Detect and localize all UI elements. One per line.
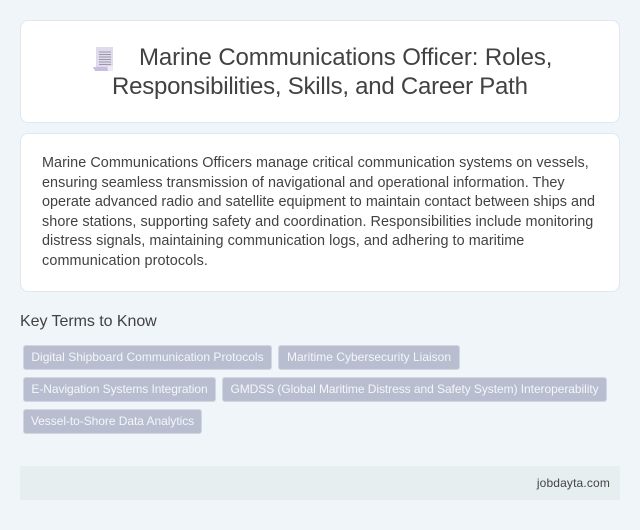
description text: distress signals, maintaining communication logs, and adhering to maritime [42, 233, 524, 249]
tag: Maritime Cybersecurity Liaison [287, 350, 451, 364]
description text: ensuring seamless transmission of navigational and operational information. They [42, 174, 565, 190]
tag [23, 409, 202, 434]
footer bar [20, 466, 620, 500]
title card [20, 20, 620, 123]
title: Marine Communications Officer: Roles, [139, 44, 552, 71]
tag: E-Navigation Systems Integration [31, 382, 208, 396]
title [112, 44, 552, 100]
tag [278, 345, 460, 370]
description text: operate advanced radio and satellite equipment to maintain contact between ships and [42, 194, 595, 210]
icon: document scroll [93, 47, 113, 71]
tag [23, 345, 272, 370]
tag [23, 377, 216, 402]
description text [42, 155, 595, 268]
description text: communication protocols. [42, 252, 208, 268]
tag [222, 377, 607, 402]
heading: key terms: Key Terms to Know [20, 313, 157, 330]
description text: Marine Communications Officers manage critical communication systems on vessels, [42, 155, 589, 171]
tag: Vessel-to-Shore Data Analytics [31, 414, 194, 428]
description panel [20, 133, 620, 292]
tag: GMDSS (Global Maritime Distress and Safety System) Interoperability [230, 382, 599, 396]
title: Responsibilities, Skills, and Career Path [112, 73, 528, 100]
key term tags [23, 345, 607, 434]
footer source text: jobdayta.com [537, 476, 610, 490]
tag: Digital Shipboard Communication Protocols [31, 350, 264, 364]
description text: shore stations, supporting safety and coordination. Responsibilities include monitoring [42, 214, 593, 230]
